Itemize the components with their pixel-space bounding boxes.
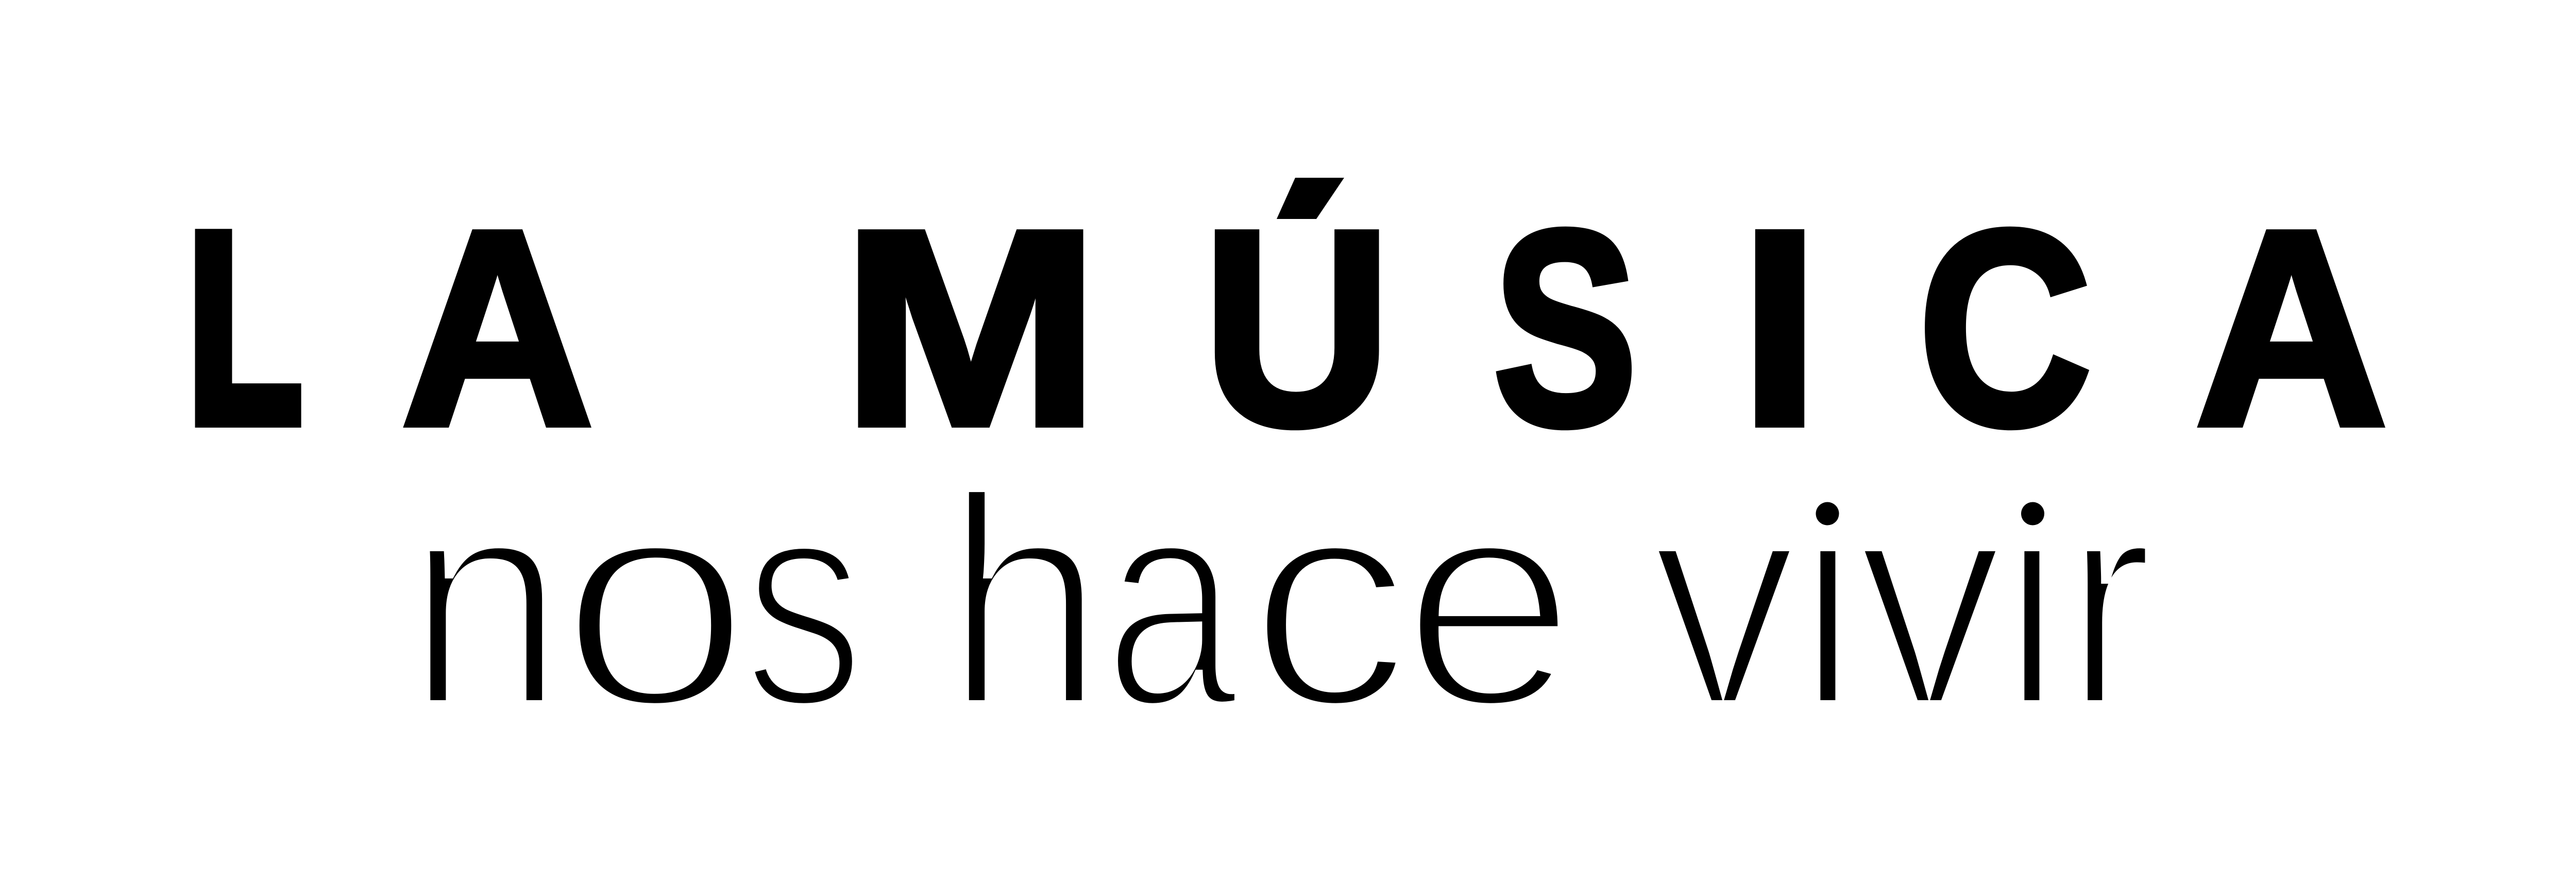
title: LA MÚSICA: L bbox=[188, 178, 302, 478]
subtitle: nos hace vivir: s bbox=[743, 432, 865, 769]
subtitle: nos hace vivir: h bbox=[944, 432, 1106, 769]
subtitle: nos hace vivir: e bbox=[1401, 432, 1577, 769]
subtitle: nos hace vivir: n bbox=[405, 432, 566, 769]
title: LA MÚSICA: C bbox=[1918, 173, 2092, 483]
subtitle: nos hace vivir bbox=[405, 432, 2154, 769]
subtitle: nos hace vivir: r bbox=[2064, 432, 2154, 769]
title: LA MÚSICA: Ú bbox=[1202, 173, 1392, 483]
title: LA MÚSICA: S bbox=[1493, 173, 1637, 483]
subtitle: nos hace vivir: c bbox=[1248, 432, 1411, 769]
subtitle: nos hace vivir: v bbox=[1651, 432, 1798, 769]
title: LA MÚSICA: I bbox=[1736, 169, 1824, 486]
subtitle: nos hace vivir: o bbox=[559, 432, 752, 769]
subtitle: nos hace vivir: a bbox=[1104, 432, 1240, 769]
title: LA MÚSICA bbox=[188, 155, 2387, 486]
title: LA MÚSICA: M bbox=[841, 173, 1100, 483]
title: LA MÚSICA: A bbox=[2195, 173, 2387, 483]
subtitle: nos hace vivir: i bbox=[1797, 432, 1859, 769]
title: LA MÚSICA: A bbox=[401, 173, 594, 483]
subtitle: nos hace vivir: i bbox=[2001, 432, 2063, 769]
subtitle: nos hace vivir: v bbox=[1857, 432, 2004, 769]
